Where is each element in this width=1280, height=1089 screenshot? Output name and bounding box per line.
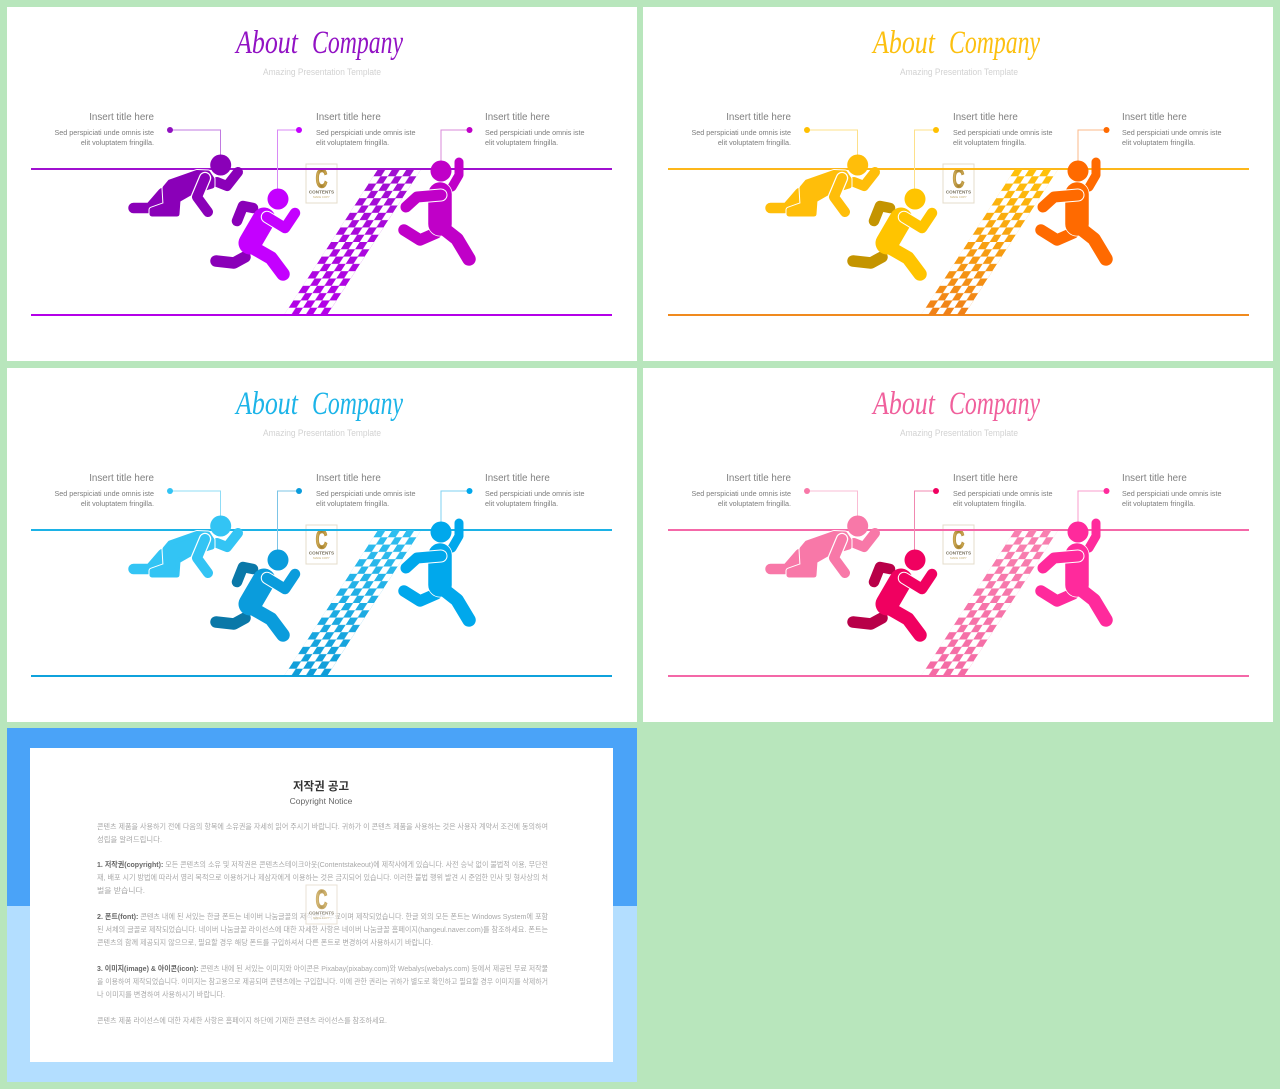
text block: left callout: Insert title here [726, 473, 792, 484]
text block: section 2 font [97, 911, 548, 947]
connector middle [914, 127, 939, 190]
text block: section 1 copyright [97, 859, 548, 895]
subtitle: Amazing Presentation Template [263, 67, 381, 77]
connector right [441, 488, 472, 523]
text block: right callout: elit voluptatem fringilla. [1122, 138, 1195, 147]
connector left [804, 127, 858, 156]
bottom track line [31, 314, 612, 316]
logo [306, 884, 337, 924]
text block: right callout: elit voluptatem fringilla. [485, 499, 558, 508]
logo [943, 524, 974, 564]
top track line [668, 529, 1249, 531]
connector right [441, 127, 472, 162]
text block: left callout [55, 112, 155, 147]
icon: leaping runner [1041, 160, 1106, 259]
text block: middle callout: Sed perspiciati unde omnis iste [316, 128, 415, 137]
title: About Company: About [871, 25, 936, 61]
logo [306, 524, 337, 564]
text block: left callout: elit voluptatem fringilla. [718, 138, 791, 147]
text block: section 3 image and icon [97, 963, 548, 999]
text block: right callout: Insert title here [1122, 112, 1187, 123]
text block: right callout [1122, 473, 1221, 508]
text block: middle callout: Insert title here [953, 473, 1018, 484]
text block: right callout: Sed perspiciati unde omnis iste [485, 128, 584, 137]
subheading: Copyright Notice [290, 796, 353, 806]
connector right [1078, 488, 1110, 523]
panel: pink slide [643, 368, 1273, 722]
text block: right callout: Insert title here [1122, 473, 1187, 484]
icon: leaping runner [404, 160, 469, 259]
connector middle [278, 488, 302, 551]
text block: middle callout [316, 473, 415, 508]
text block: section 3 image and icon: 3. 이미지(image) & 아이콘(icon): 콘텐츠 내에 된 서있는 이미지와 아이콘은 Pixabay(pixabay.com)와 Webalys(webalys.com) 등에서 제공된 무료 저작물 [97, 963, 548, 973]
panel: purple slide [7, 7, 637, 361]
connector left [167, 127, 220, 156]
text block: left callout: elit voluptatem fringilla. [81, 138, 154, 147]
title: About Company: Company [312, 25, 403, 61]
text block: right callout: elit voluptatem fringilla. [485, 138, 558, 147]
checkered finish strip [284, 530, 420, 675]
panel: yellow slide [643, 7, 1273, 361]
title: About Company: About [234, 25, 299, 61]
icon: leaping runner [404, 522, 469, 620]
text block: section 3 image and icon: 을 이용하여 제작되었습니다. 이미지는 참고용으로 제공되며 콘텐츠에는 구입합니다. 이에 관한 권리는 귀하가 별도로 확인하고 필요할 경우 이미지를 삭제하거 [97, 976, 548, 986]
title: About Company: About [234, 386, 299, 422]
text block: right callout [485, 473, 584, 508]
subtitle: Amazing Presentation Template [263, 428, 381, 438]
checkered finish strip [284, 170, 420, 314]
bottom track line [668, 675, 1249, 677]
logo [306, 164, 337, 203]
text block: middle callout: elit voluptatem fringilla. [953, 138, 1026, 147]
text block: middle callout: Sed perspiciati unde omnis iste [953, 489, 1052, 498]
text block: right callout: Insert title here [485, 473, 550, 484]
connector left [804, 488, 858, 517]
text block: left callout: Sed perspiciati unde omnis iste [55, 489, 154, 498]
top track line [668, 168, 1249, 170]
text block: left callout: Insert title here [89, 473, 155, 484]
text block: left callout: elit voluptatem fringilla. [718, 499, 791, 508]
icon: sprinting runner [216, 550, 295, 635]
connector middle [914, 488, 939, 551]
text block: right callout [1122, 112, 1221, 147]
heading: copyright notice: 저작권 공고 [293, 779, 349, 793]
text block: section 1 copyright: 재, 배포 시기 방법에 따라서 영리 목적으로 이용하거나 제삼자에게 이용하는 것은 금지되어 있습니다. 이러한 불법 행위 발견 시 준엄한 민사 및 형사상의 처 [97, 872, 548, 882]
subtitle: Amazing Presentation Template [900, 67, 1018, 77]
text block: introduction: 콘텐츠 제품을 사용하기 전에 다음의 항목에 소유권을 자세히 읽어 주시기 바랍니다. 귀하가 이 콘텐츠 제품을 사용하는 것은 사용자 계약서 조건에 동의하여 [97, 821, 548, 831]
icon: crawling runner [770, 516, 875, 575]
text block: introduction: 성립을 알려드립니다. [97, 834, 162, 844]
connector middle [278, 127, 302, 190]
panel: copyright notice [7, 728, 637, 1082]
text block: middle callout: elit voluptatem fringilla. [316, 499, 389, 508]
text block: section 1 copyright: 벌을 받습니다. [97, 885, 145, 895]
icon: sprinting runner [853, 550, 932, 635]
text block: middle callout: Insert title here [316, 112, 381, 123]
text block: section 2 font: 2. 폰트(font): 콘텐츠 내에 된 서있는 한글 폰트는 네이버 나눔글꼴의 저작물로 무료이며 제작되었습니다. 한글 외의 모든 폰트는 Windows System에 포함 [97, 911, 548, 921]
text block: left callout [692, 473, 792, 508]
text block: introduction [97, 821, 548, 844]
title: About Company: Company [312, 386, 403, 422]
title: About Company: Company [949, 25, 1040, 61]
text block: middle callout [953, 473, 1052, 508]
text block: right callout [485, 112, 584, 147]
bottom track line [31, 675, 612, 677]
top track line [31, 168, 612, 170]
title: About Company: About [871, 386, 936, 422]
text block: left callout: elit voluptatem fringilla. [81, 499, 154, 508]
text block: left callout [55, 473, 155, 508]
text block: left callout: Sed perspiciati unde omnis iste [692, 128, 791, 137]
text block: left callout: Sed perspiciati unde omnis iste [692, 489, 791, 498]
text block: closing note: 콘텐츠 제품 라이선스에 대한 자세한 사항은 홈페이지 하단에 기재한 콘텐츠 라이선스를 참조하세요. [97, 1015, 387, 1025]
text block: left callout: Insert title here [89, 112, 155, 123]
checkered finish strip [922, 169, 1058, 315]
text block: section 2 font: 된 서체의 글꼴로 제작되었습니다. 네이버 나눔글꼴 라이선스에 대한 자세한 사항은 네이버 나눔글꼴 홈페이지(hangeul.naver.com)를 참조하세요. 폰트는 [97, 924, 548, 934]
text block: right callout: Sed perspiciati unde omnis iste [1122, 489, 1221, 498]
text block: right callout: elit voluptatem fringilla. [1122, 499, 1195, 508]
text block: right callout: Insert title here [485, 112, 550, 123]
text block: section 1 copyright: 1. 저작권(copyright): 모든 콘텐츠의 소유 및 저작권은 콘텐츠스테이크아웃(Contentstakeout)에 제작사에게 있습니다. 사전 승낙 없이 불법적 이용, 무단전 [97, 859, 548, 869]
panel: blue slide [7, 368, 637, 722]
icon: leaping runner [1041, 522, 1106, 620]
connector right [1078, 127, 1110, 162]
logo [943, 164, 974, 203]
text block: section 3 image and icon: 나 이미지를 변경하여 사용하시기 바랍니다. [97, 989, 225, 999]
text block: middle callout: elit voluptatem fringilla. [953, 499, 1026, 508]
text block: middle callout: Sed perspiciati unde omnis iste [953, 128, 1052, 137]
text block: middle callout: Insert title here [953, 112, 1018, 123]
subtitle: Amazing Presentation Template [900, 428, 1018, 438]
text block: middle callout: elit voluptatem fringilla. [316, 138, 389, 147]
text block: left callout [692, 112, 792, 147]
text block: middle callout [316, 112, 415, 147]
text block: left callout: Insert title here [726, 112, 792, 123]
checkered finish strip [922, 530, 1058, 675]
connector left [167, 488, 220, 517]
text block: section 2 font: 콘텐츠의 함께 제공되지 않으므로, 필요할 경우 해당 폰트를 구입하셔서 다른 폰트로 변경하여 사용하시기 바랍니다. [97, 937, 433, 947]
icon: crawling runner [134, 516, 238, 575]
text block: left callout: Sed perspiciati unde omnis iste [55, 128, 154, 137]
icon: crawling runner [770, 154, 875, 214]
icon: sprinting runner [216, 188, 295, 274]
title: About Company: Company [949, 386, 1040, 422]
top track line [31, 529, 612, 531]
text block: middle callout: Insert title here [316, 473, 381, 484]
text block: right callout: Sed perspiciati unde omnis iste [1122, 128, 1221, 137]
text block: middle callout: Sed perspiciati unde omnis iste [316, 489, 415, 498]
icon: crawling runner [134, 154, 238, 214]
text block: middle callout [953, 112, 1052, 147]
bottom track line [668, 314, 1249, 316]
text block: right callout: Sed perspiciati unde omnis iste [485, 489, 584, 498]
icon: sprinting runner [853, 188, 932, 274]
